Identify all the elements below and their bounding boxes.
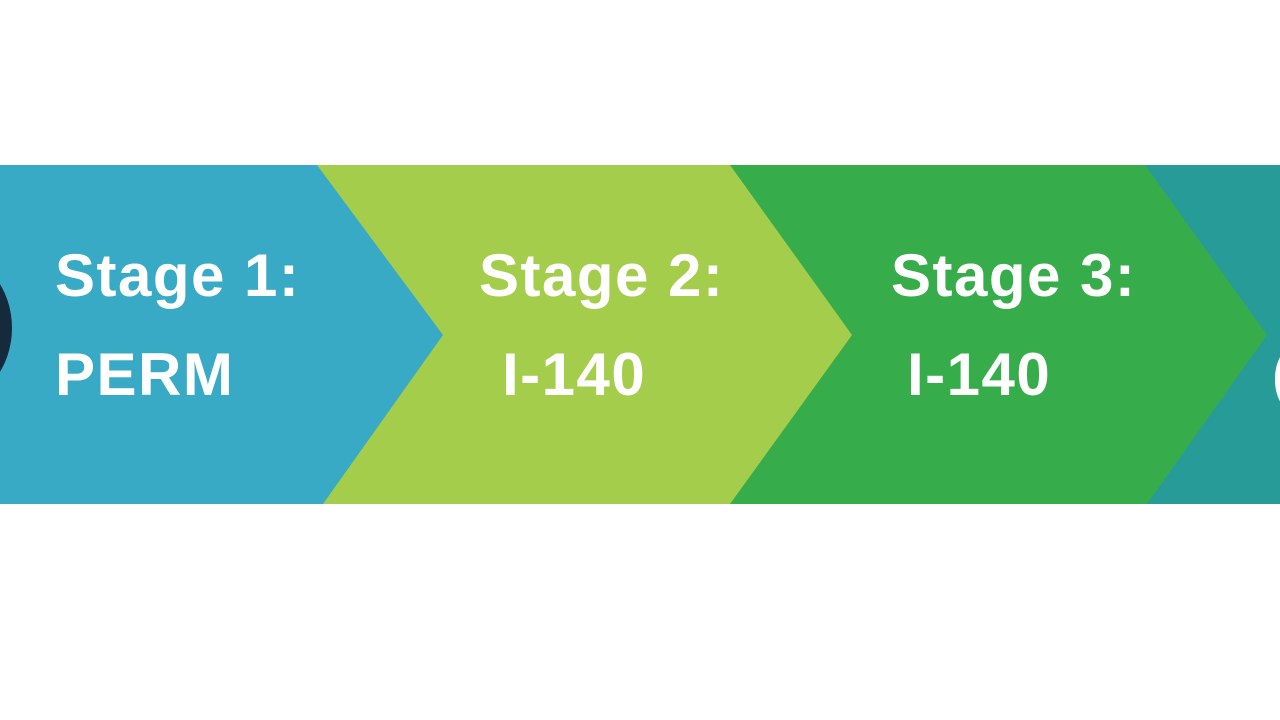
panel: stage 3 chevron	[0, 165, 1267, 504]
text: stage 1: PERM	[55, 341, 234, 408]
text: stage 2: I-140	[502, 341, 646, 408]
text: stage 1	[55, 242, 300, 408]
text: stage 2: Stage 2:	[479, 242, 724, 309]
text: stage 2	[479, 242, 724, 408]
panel: stage 2 chevron	[0, 165, 852, 504]
text: stage 3: Stage 3:	[891, 242, 1136, 309]
icon: dark circle at left edge	[0, 254, 12, 402]
panel: stage 1 chevron	[0, 165, 443, 504]
panel: stage 4 teal background	[0, 165, 1280, 504]
text: stage 1: Stage 1:	[55, 242, 300, 309]
text: stage 3: I-140	[907, 341, 1051, 408]
text: stage 3	[891, 242, 1136, 408]
